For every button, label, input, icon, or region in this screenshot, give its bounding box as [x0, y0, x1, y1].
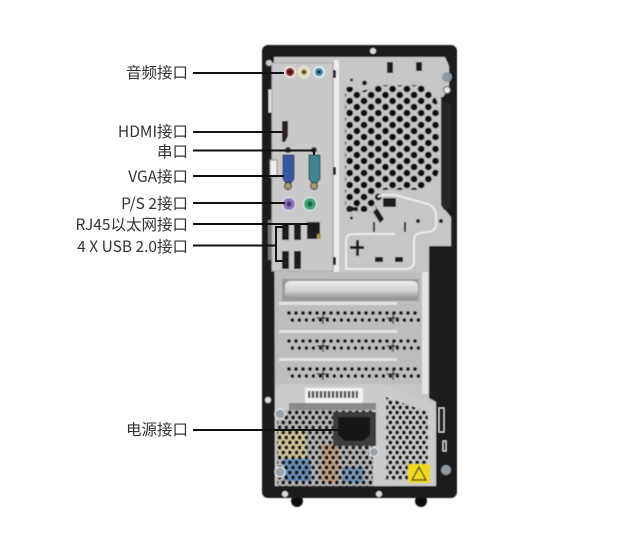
- left case hole: [266, 60, 272, 66]
- barcode label: [305, 388, 363, 403]
- panel: power supply plate: [275, 384, 436, 486]
- label: VGA port: VGA接口: [128, 165, 188, 187]
- foot: right: [415, 495, 427, 507]
- label: PS/2 port: P/S 2接口: [121, 192, 188, 214]
- leader line: RJ45: [193, 223, 308, 225]
- USB ports: [282, 224, 301, 269]
- warning sticker: [408, 464, 430, 483]
- foot: left: [291, 495, 303, 507]
- left lower hole: [265, 397, 271, 403]
- shield right rail: [334, 60, 339, 272]
- panel: rear I/O shield: [270, 60, 339, 272]
- RJ45 port: [307, 222, 321, 239]
- side ports: lower right: [439, 408, 446, 451]
- upper silver chassis plate: [274, 57, 451, 486]
- label: serial port: [157, 140, 314, 162]
- leader line: PS/2: [193, 202, 285, 204]
- fan grille: [344, 84, 440, 212]
- case body: [262, 45, 457, 498]
- label: USB ports: 4 X USB 2.0接口: [77, 235, 188, 257]
- expansion slot vent rows: [279, 272, 428, 394]
- VGA side label: [270, 160, 277, 177]
- label: audio port: 音频接口: [126, 61, 188, 83]
- PSU top bar: [289, 403, 376, 410]
- PS/2 mouse port: [304, 198, 316, 210]
- serial port: [309, 147, 320, 190]
- computer tower rear view: [262, 45, 457, 507]
- label: power port: 电源接口: [126, 418, 188, 440]
- leader line: serial: [193, 150, 314, 155]
- left lower slot: [268, 220, 273, 260]
- PSU internal colours: [278, 430, 306, 458]
- bottom holes: [282, 491, 382, 497]
- VGA port: [283, 147, 294, 190]
- mount plus cutout: [350, 240, 364, 256]
- fan mount slots: [347, 62, 422, 262]
- PSU thumb screws: [275, 409, 378, 477]
- label: HDMI port: HDMI接口: [118, 120, 188, 142]
- left side slot: [268, 89, 273, 113]
- label: RJ45 port: RJ45以太网接口: [75, 213, 188, 235]
- leader line: HDMI: [193, 131, 283, 133]
- top centre hole: [370, 48, 376, 54]
- rear handle slot: [441, 102, 451, 210]
- top thumb screw: [442, 72, 452, 82]
- top vent screw hole: [444, 86, 450, 94]
- power socket: [333, 412, 376, 446]
- label: serial port: 串口: [157, 140, 188, 162]
- expansion slot blank: [275, 272, 428, 384]
- leader bracket: USB: [193, 227, 283, 261]
- leader line: power: [193, 429, 340, 431]
- lower right thumb screw: [441, 465, 451, 475]
- label: USB ports: [77, 227, 283, 261]
- recessed plate outline: [346, 195, 436, 269]
- leader line: audio: [193, 72, 284, 74]
- leader line: VGA: [193, 175, 284, 177]
- PSU vent mesh: [277, 410, 373, 486]
- audio jacks: [284, 66, 325, 78]
- HDMI port: [282, 121, 288, 142]
- fan small holes: [350, 78, 443, 223]
- PS/2 keyboard port: [282, 198, 296, 210]
- shield rail clips: [333, 70, 336, 265]
- side vent mesh: [386, 397, 428, 480]
